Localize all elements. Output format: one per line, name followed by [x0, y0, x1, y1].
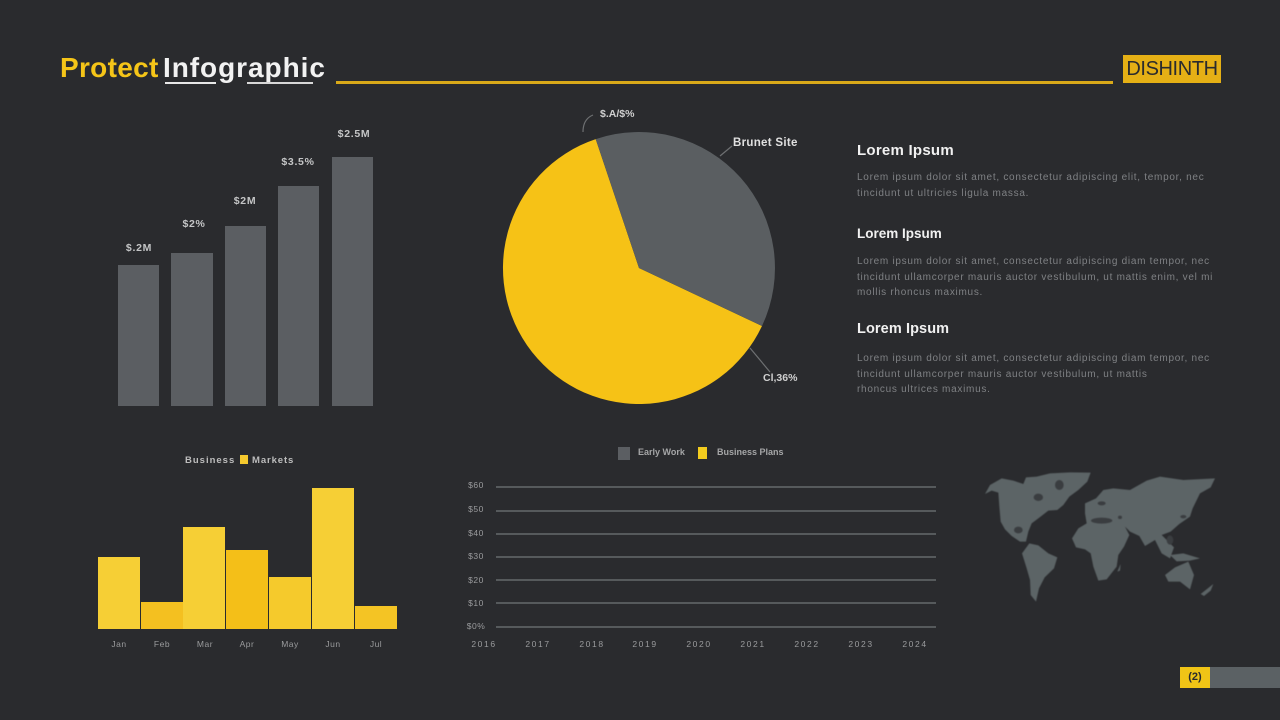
pie label bottom: Cl,36% — [763, 372, 797, 384]
x label 1: Jan — [111, 639, 127, 649]
icon: world map — [985, 472, 1215, 602]
page number — [1180, 667, 1210, 688]
indonesia — [1170, 553, 1200, 561]
x label 9: 2024 — [902, 639, 928, 649]
legend grey swatch — [618, 447, 630, 460]
y label 6: $10 — [468, 598, 484, 608]
label 4: $3.5% — [281, 156, 315, 168]
x label 3: Mar — [197, 639, 213, 649]
y label 7: $0% — [467, 621, 485, 631]
y label 4: $30 — [468, 551, 484, 561]
pie leader lines — [583, 115, 770, 372]
heading 2: Lorem Ipsum — [857, 226, 942, 241]
title: Infographic — [163, 52, 326, 83]
body 3: rhoncus ultrices maximus. — [857, 384, 991, 395]
badge: DISHINTH — [1126, 58, 1218, 80]
australia — [1165, 562, 1194, 589]
title: Protect — [60, 52, 159, 83]
x label 6: 2021 — [740, 639, 766, 649]
body 2: tincidunt ullamcorper mauris auctor vestibulum, ut mattis enim, vel mi — [857, 272, 1213, 283]
y label 5: $20 — [468, 575, 484, 585]
x label 4: Apr — [240, 639, 254, 649]
body 2: Lorem ipsum dolor sit amet, consectetur adipiscing diam tempor, nec — [857, 256, 1210, 267]
label 1: $.2M — [126, 242, 152, 254]
text block 3 — [857, 321, 1210, 395]
x label 7: Jul — [370, 639, 382, 649]
label 5: $2.5M — [338, 128, 370, 140]
new zealand — [1201, 584, 1213, 596]
legend yellow swatch — [698, 447, 707, 459]
page number badge — [1180, 667, 1280, 688]
bar 2 — [141, 602, 183, 629]
title underline — [336, 81, 1113, 84]
x label 3: 2018 — [579, 639, 605, 649]
pie label top: $.A/$% — [600, 108, 634, 120]
bar 3 — [225, 226, 266, 406]
south america — [1022, 543, 1057, 602]
x label 2: 2017 — [525, 639, 551, 649]
x label 5: 2020 — [686, 639, 712, 649]
body 1: tincidunt ut ultricies ligula massa. — [857, 188, 1029, 199]
bar 5 — [332, 157, 373, 406]
gridlines — [496, 486, 936, 488]
heading 3: Lorem Ipsum — [857, 321, 949, 337]
x label 1: 2016 — [471, 639, 497, 649]
bar 2 — [171, 253, 213, 406]
pie slice: grey — [596, 132, 775, 326]
legend swatch — [240, 455, 248, 464]
panel: yellow bar chart — [98, 455, 397, 649]
panel: grey bar chart — [118, 128, 373, 406]
text block 2 — [857, 226, 1213, 298]
legend text right: Markets — [252, 455, 294, 466]
x label 2: Feb — [154, 639, 170, 649]
page number: (2) — [1188, 671, 1202, 683]
x label 6: Jun — [325, 639, 341, 649]
bar 1 — [98, 557, 140, 629]
body 3 — [857, 353, 1210, 395]
body 3: Lorem ipsum dolor sit amet, consectetur adipiscing diam tempor, nec — [857, 353, 1210, 364]
y label 3: $40 — [468, 528, 484, 538]
y label 2: $50 — [468, 504, 484, 514]
body 2: mollis rhoncus maximus. — [857, 287, 983, 298]
bar 4 — [226, 550, 268, 629]
y label 1: $60 — [468, 480, 484, 490]
bar 4 — [278, 186, 319, 406]
body 1 — [857, 172, 1204, 199]
body 2 — [857, 256, 1213, 298]
label 3: $2M — [234, 195, 256, 207]
x label 7: 2022 — [794, 639, 820, 649]
madagascar — [1117, 564, 1121, 572]
x label 4: 2019 — [632, 639, 658, 649]
eurasia and africa — [1072, 477, 1215, 581]
x label 5: May — [281, 639, 299, 649]
label 2: $2% — [182, 218, 206, 230]
pie label right: Brunet Site — [733, 137, 798, 149]
body 1: Lorem ipsum dolor sit amet, consectetur adipiscing elit, tempor, nec — [857, 172, 1204, 183]
legend text left: Business — [185, 455, 235, 466]
bar 6 — [312, 488, 354, 629]
bar 7 — [355, 606, 397, 629]
bar 1 — [118, 265, 159, 406]
panel: line chart grid — [466, 447, 936, 649]
legend grey text: Early Work — [638, 447, 685, 457]
chart legend — [185, 455, 294, 466]
pie slice: yellow — [503, 139, 762, 404]
title — [60, 52, 326, 84]
bar 3 — [183, 527, 225, 629]
bar 5 — [269, 577, 311, 629]
text block 1 — [857, 142, 1204, 199]
heading 1: Lorem Ipsum — [857, 142, 954, 159]
legend yellow text: Business Plans — [717, 447, 784, 457]
x label 8: 2023 — [848, 639, 874, 649]
body 3: tincidunt ullamcorper mauris auctor vestibulum, ut mattis — [857, 369, 1148, 380]
north america and greenland — [985, 472, 1091, 542]
inland seas — [1014, 480, 1186, 545]
